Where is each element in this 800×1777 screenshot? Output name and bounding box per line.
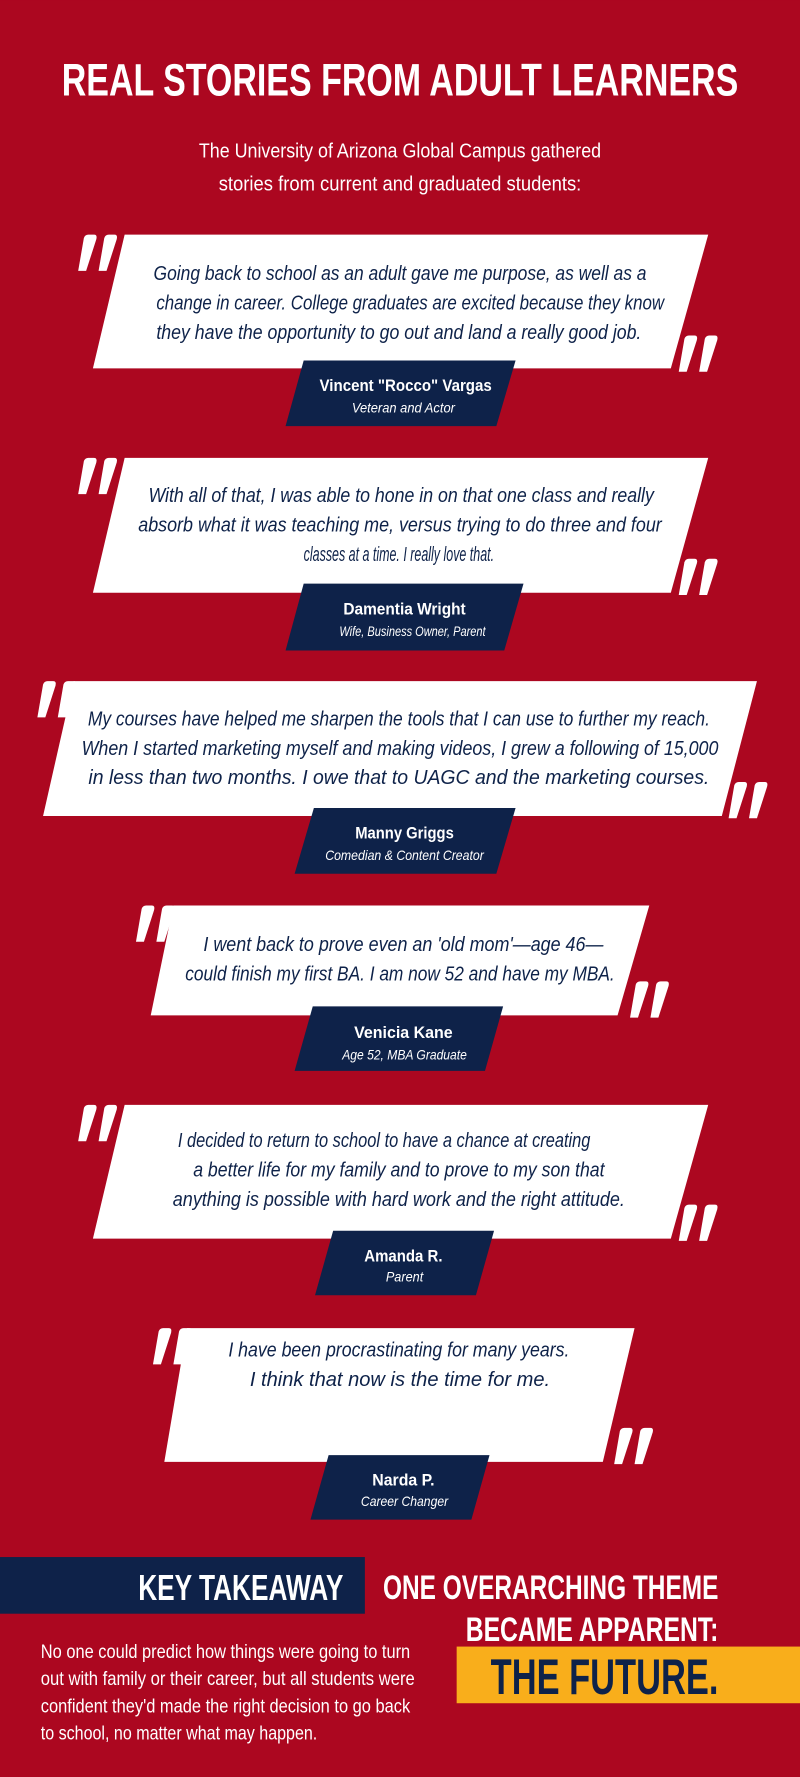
- panel: quote 5: I decided to return to school to have a chance at creating: [178, 1130, 591, 1152]
- panel: quote 3: [37, 681, 767, 874]
- key takeaway banner: KEY TAKEAWAY: [138, 1567, 343, 1608]
- takeaway paragraph: confident they'd made the right decision to go back: [41, 1696, 411, 1717]
- panel: quote 2: Damentia Wright: [343, 599, 466, 618]
- theme heading: [383, 1569, 718, 1649]
- takeaway paragraph: [41, 1642, 415, 1744]
- panel: quote 3: My courses have helped me sharpen the tools that I can use to further my reach.: [88, 708, 710, 730]
- panel: quote 1: [78, 235, 718, 426]
- panel: quote 4: Venicia Kane: [354, 1023, 453, 1042]
- panel: quote 3: Comedian & Content Creator: [325, 848, 485, 864]
- subtitle: stories from current and graduated students:: [219, 173, 581, 195]
- panel: quote 5: a better life for my family and to prove to my son that: [193, 1159, 606, 1181]
- panel: quote 1: Going back to school as an adult gave me purpose, as well as a: [154, 263, 646, 285]
- panel: quote 2: absorb what it was teaching me, versus trying to do three and four: [138, 515, 663, 537]
- panel: quote 2: Wife, Business Owner, Parent: [339, 624, 486, 640]
- panel: quote 5: Parent: [386, 1270, 424, 1286]
- panel: quote 3: Manny Griggs: [355, 824, 454, 843]
- panel: quote 4: could finish my first BA. I am now 52 and have my MBA.: [185, 963, 615, 985]
- panel: quote 6: Narda P.: [372, 1471, 435, 1490]
- panel: quote 6: [153, 1328, 653, 1520]
- key takeaway banner: [0, 1557, 365, 1614]
- subtitle: The University of Arizona Global Campus gathered: [199, 141, 601, 163]
- panel: quote 5: [78, 1105, 718, 1295]
- panel: quote 3: When I started marketing myself and making videos, I grew a following of 15,000: [82, 738, 719, 760]
- panel: quote 1: Vincent "Rocco" Vargas: [320, 376, 492, 395]
- panel: quote 1: they have the opportunity to go out and land a really good job.: [156, 322, 641, 344]
- panel: quote 6: I have been procrastinating for many years.: [228, 1339, 569, 1361]
- takeaway paragraph: to school, no matter what may happen.: [41, 1723, 317, 1744]
- panel: quote 1: change in career. College graduates are excited because they know: [156, 292, 665, 314]
- panel: quote 4: I went back to prove even an 'old mom'—age 46—: [203, 934, 604, 956]
- panel: quote 2: [78, 458, 718, 651]
- panel: quote 2: With all of that, I was able to hone in on that one class and really: [148, 485, 655, 507]
- panel: quote 1: Veteran and Actor: [352, 401, 456, 417]
- takeaway paragraph: out with family or their career, but all students were: [41, 1669, 415, 1690]
- panel: quote 6: Career Changer: [361, 1494, 449, 1510]
- panel: quote 6: I think that now is the time for me.: [250, 1369, 550, 1391]
- panel: quote 2: classes at a time. I really love that.: [304, 544, 494, 566]
- panel: quote 3: in less than two months. I owe that to UAGC and the marketing courses.: [88, 767, 709, 789]
- panel: quote 4: [136, 905, 669, 1071]
- panel: quote 5: anything is possible with hard work and the right attitude.: [173, 1189, 625, 1211]
- panel: quote 5: Amanda R.: [364, 1246, 442, 1265]
- panel: quote 4: Age 52, MBA Graduate: [341, 1048, 467, 1064]
- takeaway paragraph: No one could predict how things were going to turn: [41, 1642, 410, 1663]
- subtitle: [199, 141, 601, 195]
